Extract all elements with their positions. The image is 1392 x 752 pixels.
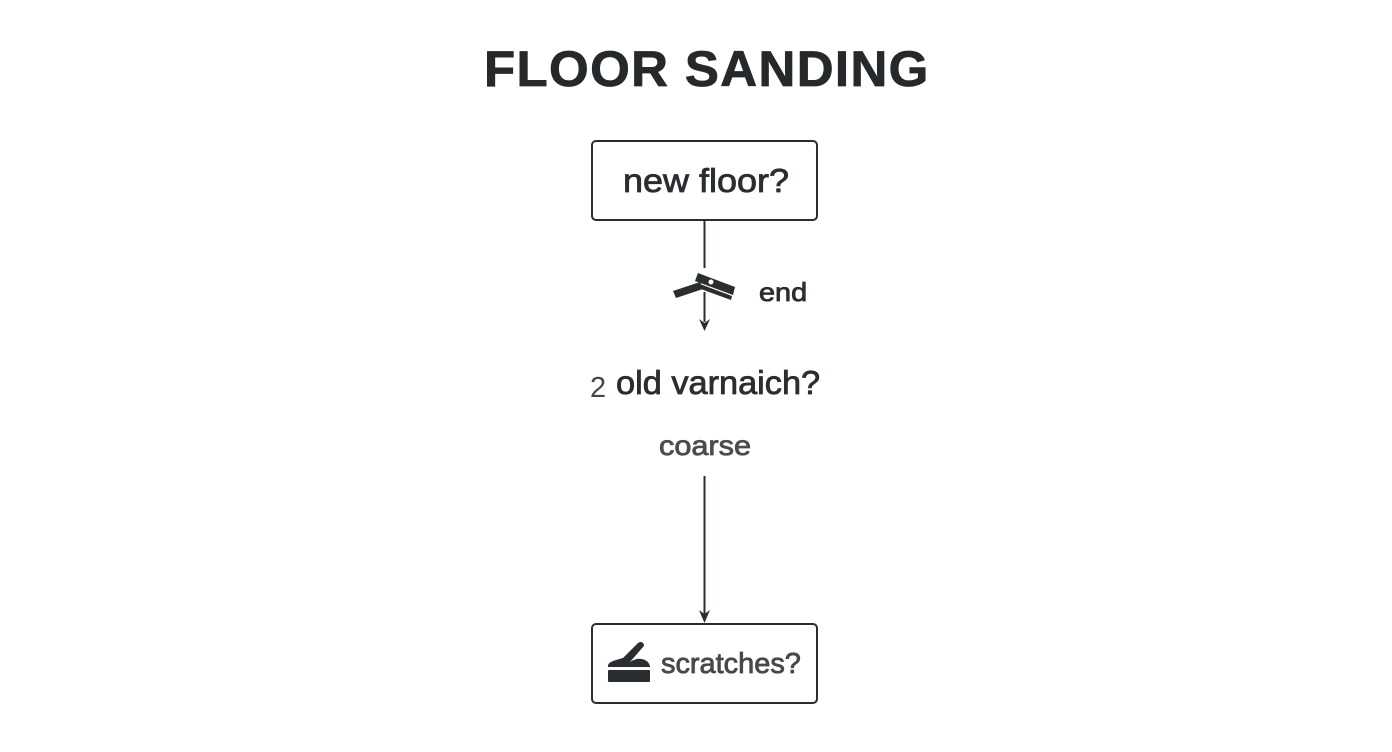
title: FLOOR SANDING	[484, 41, 930, 97]
decision box: new floor	[591, 140, 818, 221]
icon: scraper on block	[608, 642, 650, 682]
label: scratches: scratches?	[661, 648, 801, 680]
step number: 2	[590, 372, 606, 404]
decision box: scratches	[591, 623, 818, 704]
label: new floor: new floor?	[623, 162, 789, 199]
label: coarse: coarse	[659, 430, 751, 461]
label: old varnish: old varnaich?	[616, 364, 820, 401]
label: end: end	[759, 277, 807, 307]
